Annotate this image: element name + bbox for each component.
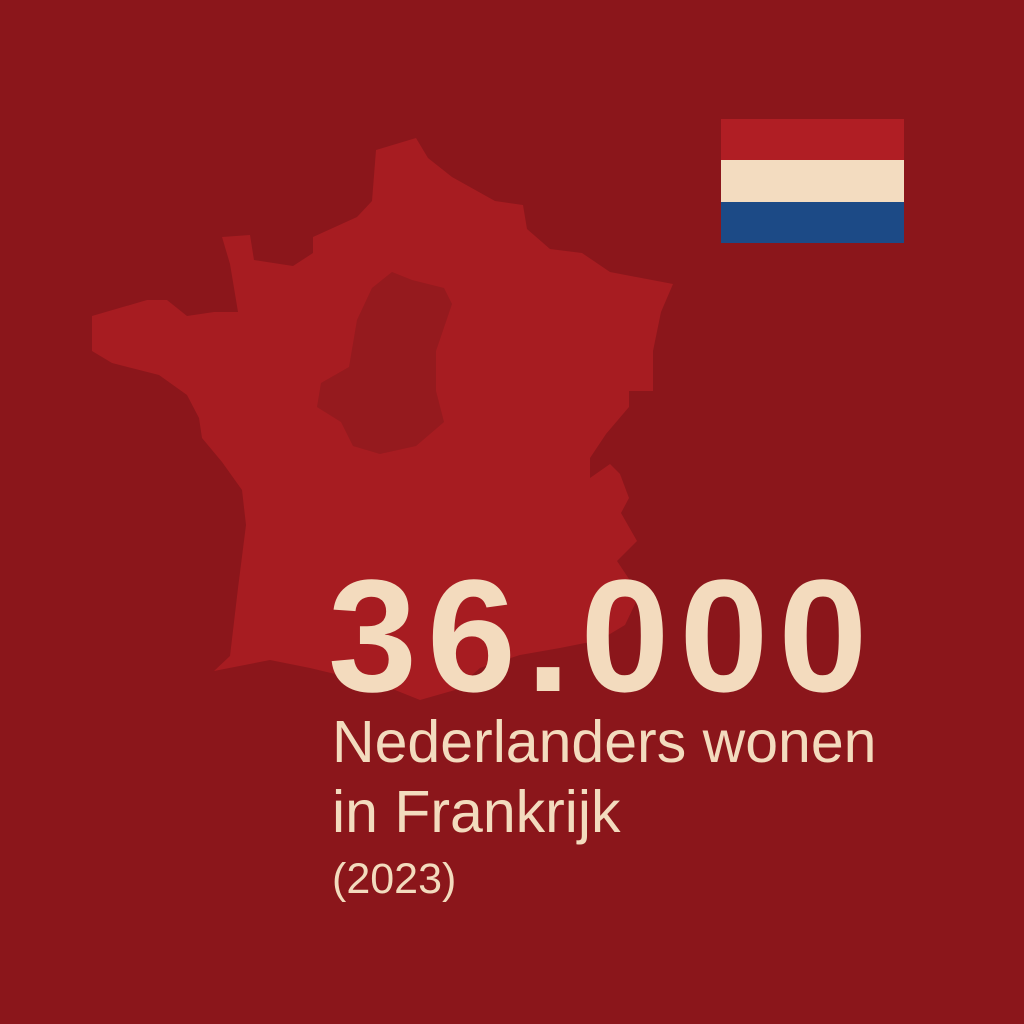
subtitle text: in Frankrijk — [332, 779, 620, 845]
subtitle text: Nederlanders wonen — [332, 709, 876, 775]
icon: Dutch flag — [721, 119, 904, 243]
big number: 36.000 — [328, 546, 877, 725]
year: (2023) — [332, 855, 456, 903]
map: highlighted central region — [317, 272, 452, 454]
subtitle text — [332, 709, 876, 845]
